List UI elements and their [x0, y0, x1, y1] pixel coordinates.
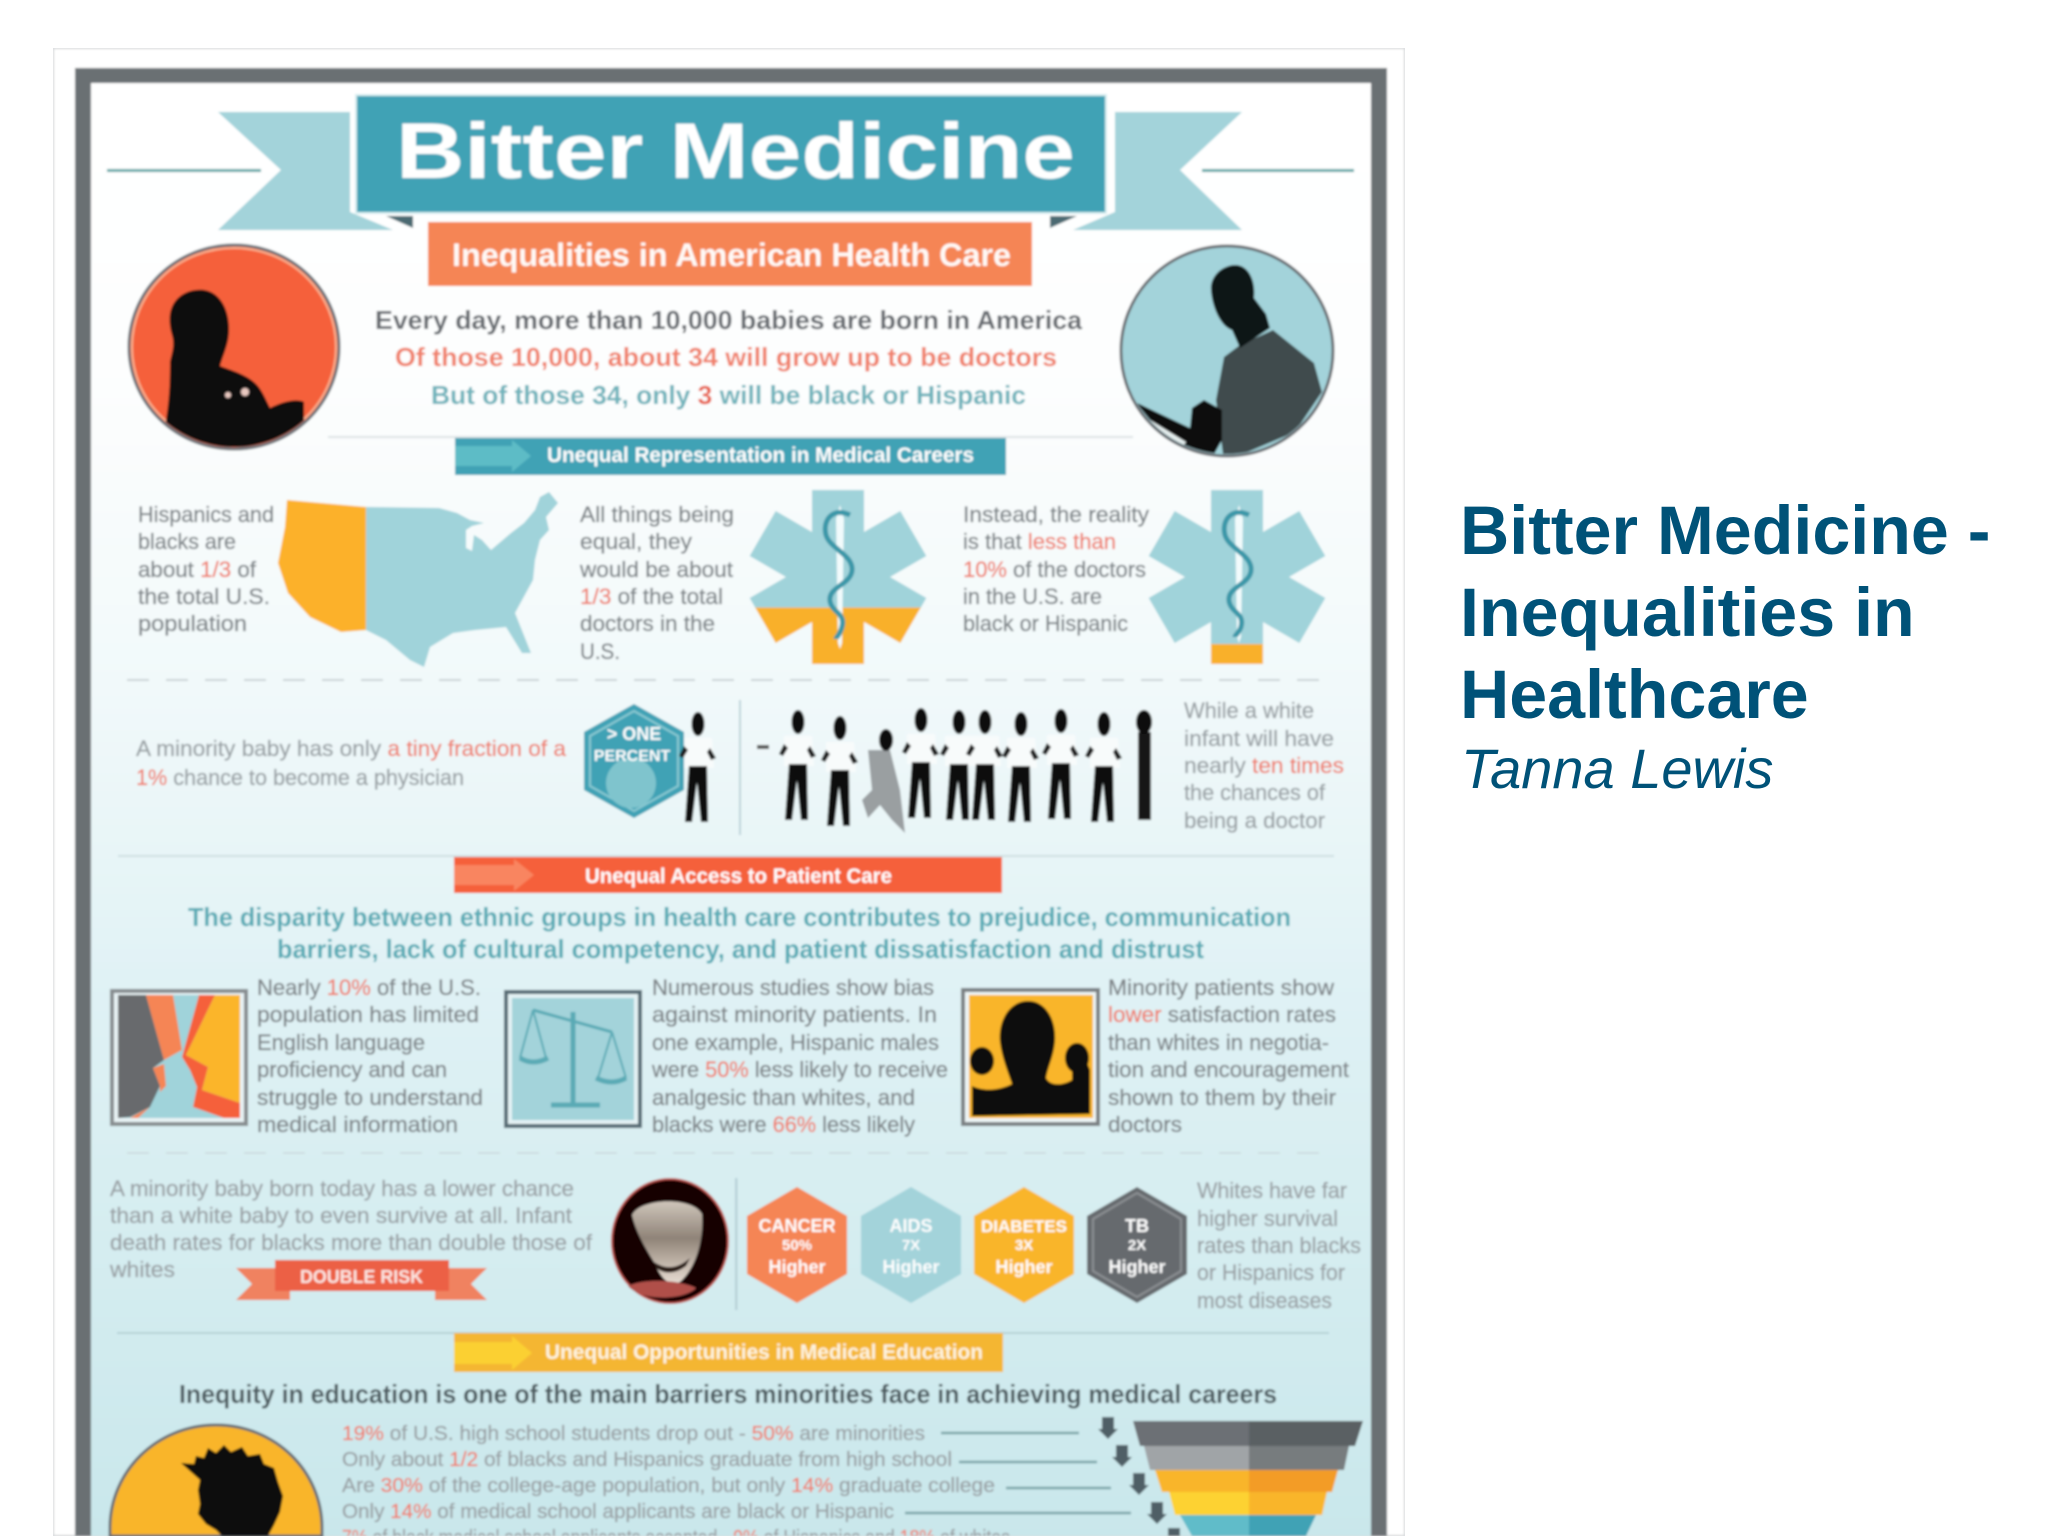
text: population share: blacks are — [138, 529, 236, 554]
text: satisfaction: lower satisfaction rates — [1108, 1002, 1336, 1027]
hexagon: diabetes: Higher — [995, 1257, 1053, 1277]
text: reality — [963, 502, 1149, 636]
text: reality: Instead, the reality — [963, 502, 1149, 527]
intro text: But of those 34, only 3 will be black or Hispanic — [431, 380, 1026, 410]
text: population share: the total U.S. — [138, 584, 270, 609]
text: bias: analgesic than whites, and — [652, 1085, 915, 1110]
text: infant mortality — [109, 1176, 593, 1282]
icon: two faces — [112, 991, 246, 1124]
text: survival: higher survival — [1197, 1206, 1338, 1231]
text: expected doctors: U.S. — [580, 639, 620, 664]
intro text — [375, 305, 1083, 410]
text: language — [257, 975, 483, 1137]
list: education statistics: Are 30% of the college-age population, but only 14% graduate college — [342, 1475, 995, 1497]
text: reality: 10% of the doctors — [963, 557, 1146, 582]
title banner — [356, 95, 1106, 213]
section bar: unequal access — [454, 857, 1002, 893]
icon: star of life one third — [750, 490, 926, 664]
hexagon: AIDS: Higher — [882, 1257, 940, 1277]
list: education statistics: Only 14% of medical school applicants are black or Hispanic — [342, 1501, 894, 1523]
text: satisfaction: than whites in negotia- — [1108, 1030, 1329, 1055]
icon: baby portrait — [612, 1179, 728, 1303]
text: population share — [138, 502, 274, 636]
side title — [1460, 493, 1990, 800]
text: bias: were 50% less likely to receive — [651, 1057, 948, 1082]
side title: Bitter Medicine - — [1460, 493, 1990, 569]
icon: scales of justice — [506, 992, 640, 1126]
intro text: Every day, more than 10,000 babies are born in America — [375, 305, 1083, 335]
text: language: Nearly 10% of the U.S. — [257, 975, 481, 1000]
infographic poster — [53, 48, 1405, 1536]
hexagon: diabetes — [974, 1187, 1074, 1303]
icon: star of life ten percent — [1149, 490, 1325, 664]
text: infant mortality: death rates for blacks more than double those of — [110, 1230, 593, 1255]
text: tiny fraction: A minority baby has only a tiny fraction of a — [136, 736, 567, 761]
icon: one percent hexagon: PERCENT — [594, 748, 670, 765]
list: education statistics: 19% of U.S. high school students drop out - 50% are minorities — [342, 1423, 925, 1445]
text: population share: Hispanics and — [138, 502, 274, 527]
icon: group of doctors — [757, 708, 1152, 833]
teal statement: barriers, lack of cultural competency, and patient dissatisfaction and distrust — [277, 934, 1204, 964]
text: ten times: While a white — [1184, 698, 1314, 723]
hexagon: cancer: Higher — [768, 1257, 826, 1277]
icon: one percent hexagon: > ONE — [607, 724, 661, 744]
text: ten times: infant will have — [1184, 726, 1334, 751]
text: bias: blacks were 66% less likely — [652, 1112, 915, 1137]
section bar: unequal representation — [455, 438, 1006, 475]
leader lines — [905, 1433, 1131, 1513]
text: reality: black or Hispanic — [963, 611, 1128, 636]
education heading: Inequity in education is one of the main barriers minorities face in achieving medical careers — [179, 1379, 1277, 1409]
hexagon: AIDS — [861, 1187, 961, 1303]
hexagon: cancer: 50% — [782, 1237, 812, 1254]
text: ten times — [1184, 698, 1344, 833]
text: expected doctors: equal, they — [580, 529, 692, 554]
text: survival: or Hispanics for — [1197, 1260, 1345, 1285]
text: language: proficiency and can — [257, 1057, 447, 1082]
hexagon: TB: Higher — [1108, 1257, 1166, 1277]
text: satisfaction: Minority patients show — [1108, 975, 1334, 1000]
side title: Inequalities in — [1460, 575, 1915, 651]
ribbon: double risk — [236, 1260, 487, 1300]
funnel — [1133, 1421, 1363, 1536]
hexagon: cancer — [747, 1187, 847, 1303]
subtitle banner: Inequalities in American Health Care — [452, 237, 1011, 273]
list: education statistics: Only about 1/2 of blacks and Hispanics graduate from high school — [342, 1449, 952, 1471]
text: language: population has limited — [257, 1002, 479, 1027]
text: population share: about 1/3 of — [138, 557, 257, 582]
title ribbon tails — [107, 112, 1354, 230]
text: expected doctors — [579, 502, 734, 664]
text: expected doctors: All things being — [580, 502, 734, 527]
text: satisfaction: doctors — [1108, 1112, 1182, 1137]
subtitle banner — [428, 222, 1032, 286]
text: language: English language — [257, 1030, 425, 1055]
small down arrows — [1098, 1417, 1180, 1536]
icon: single doctor — [679, 712, 716, 822]
text: ten times: nearly ten times — [1184, 753, 1344, 778]
text: expected doctors: would be about — [579, 557, 733, 582]
icon: baby silhouette in orange circle — [129, 245, 339, 450]
text: infant mortality: whites — [109, 1257, 175, 1282]
hexagon: AIDS: 7X — [902, 1237, 920, 1254]
icon: person covering ears — [963, 990, 1098, 1124]
text: survival: rates than blacks — [1197, 1233, 1361, 1258]
text: infant mortality: A minority baby born today has a lower chance — [110, 1176, 574, 1201]
icon: student silhouette — [110, 1425, 322, 1536]
text: infant mortality: than a white baby to even survive at all. Infant — [110, 1203, 572, 1228]
section bar: unequal access: Unequal Access to Patient Care — [585, 865, 892, 888]
text: satisfaction: shown to them by their — [1108, 1085, 1336, 1110]
text: survival: Whites have far — [1197, 1178, 1347, 1203]
section bar: unequal opportunities: Unequal Opportunities in Medical Education — [545, 1341, 983, 1364]
teal statement: The disparity between ethnic groups in health care contributes to prejudice, communication — [188, 902, 1291, 932]
icon: US map — [278, 492, 558, 667]
hexagon: cancer: CANCER — [758, 1216, 836, 1236]
text: ten times: the chances of — [1184, 780, 1326, 805]
teal statement — [188, 902, 1291, 964]
grey poster frame — [75, 68, 1387, 1536]
icon: one percent hexagon — [584, 704, 684, 818]
text: expected doctors: 1/3 of the total — [580, 584, 723, 609]
hexagon: diabetes: DIABETES — [981, 1217, 1067, 1236]
text: satisfaction — [1108, 975, 1349, 1137]
title banner: Bitter Medicine — [396, 106, 1075, 195]
hexagon: diabetes: 3X — [1015, 1237, 1033, 1254]
text: language: medical information — [257, 1112, 458, 1137]
section bar: unequal opportunities — [454, 1333, 1003, 1372]
text: expected doctors: doctors in the — [580, 611, 715, 636]
side title: Tanna Lewis — [1461, 737, 1773, 800]
text: language: struggle to understand — [257, 1085, 483, 1110]
icon: doctor silhouette in blue circle — [1121, 246, 1333, 462]
hexagon: TB: 2X — [1128, 1237, 1146, 1254]
text: bias: Numerous studies show bias — [652, 975, 934, 1000]
side title: Healthcare — [1460, 657, 1809, 733]
text: survival — [1197, 1178, 1361, 1313]
text: bias — [651, 975, 948, 1137]
ribbon: double risk: DOUBLE RISK — [300, 1267, 423, 1287]
hexagon: TB: TB — [1125, 1216, 1149, 1236]
list: education statistics — [342, 1423, 1010, 1536]
text: population share: population — [138, 611, 247, 636]
section bar: unequal representation: Unequal Representation in Medical Careers — [547, 444, 974, 467]
hexagon: TB — [1087, 1187, 1187, 1303]
text: reality: in the U.S. are — [963, 584, 1102, 609]
text: reality: is that less than — [963, 529, 1116, 554]
hexagon: AIDS: AIDS — [889, 1216, 933, 1236]
text: ten times: being a doctor — [1184, 808, 1325, 833]
intro text: Of those 10,000, about 34 will grow up to be doctors — [395, 342, 1057, 372]
text: survival: most diseases — [1197, 1288, 1332, 1313]
text: tiny fraction — [136, 736, 567, 790]
text: tiny fraction: 1% chance to become a physician — [136, 765, 464, 790]
text: bias: one example, Hispanic males — [652, 1030, 939, 1055]
text: satisfaction: tion and encouragement — [1108, 1057, 1349, 1082]
text: bias: against minority patients. In — [652, 1002, 937, 1027]
